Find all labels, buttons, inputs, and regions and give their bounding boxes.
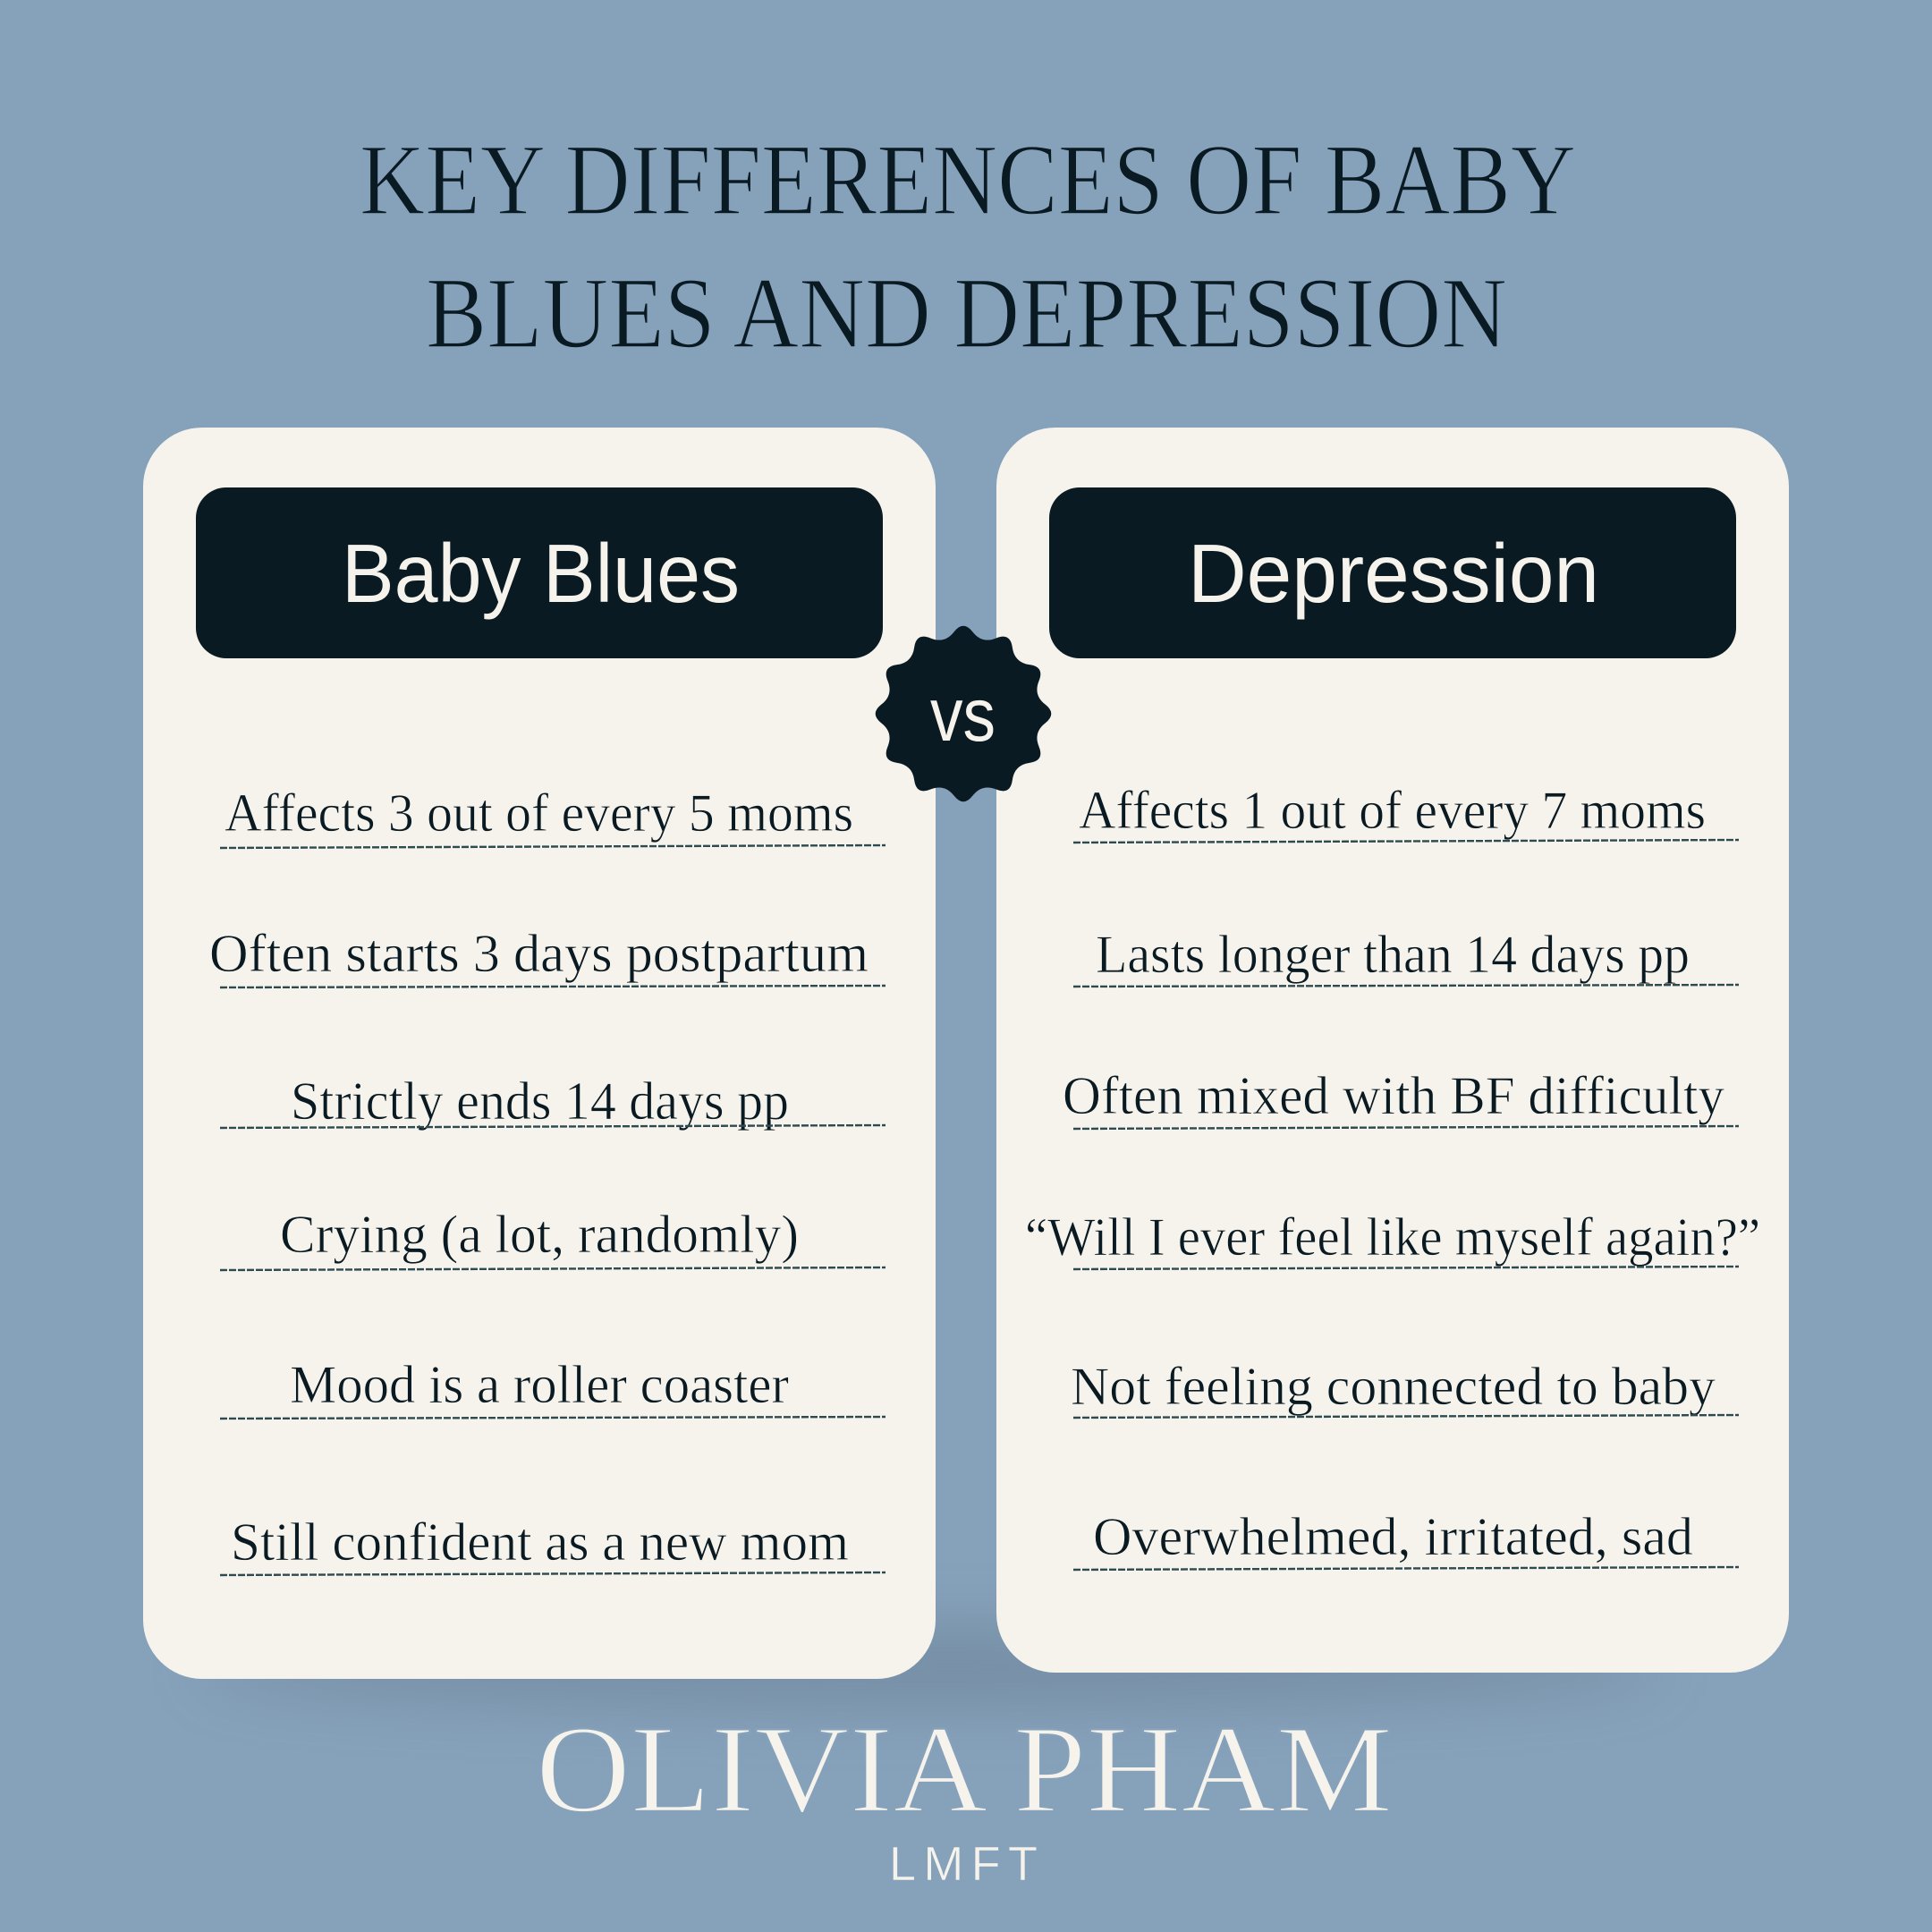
heading: depression bbox=[1049, 487, 1736, 658]
panel: baby blues bbox=[143, 428, 936, 1679]
row: confidence: Still confident as a new mom bbox=[231, 1513, 849, 1572]
brand name: OLIVIA PHAM bbox=[536, 1700, 1393, 1839]
row: prevalence: Affects 3 out of every 5 moms bbox=[225, 784, 853, 843]
heading: baby blues: Baby Blues bbox=[342, 527, 740, 620]
row: crying: Crying (a lot, randomly) bbox=[280, 1205, 799, 1264]
title bbox=[360, 124, 1576, 369]
title: BLUES AND DEPRESSION bbox=[426, 258, 1507, 369]
vs badge: vs bbox=[930, 673, 996, 757]
row: feeding: Often mixed with BF difficulty bbox=[1063, 1066, 1724, 1125]
row: duration: Lasts longer than 14 days pp bbox=[1096, 925, 1690, 984]
row: bonding: Not feeling connected to baby bbox=[1071, 1357, 1716, 1416]
row: emotions: Overwhelmed, irritated, sad bbox=[1093, 1507, 1693, 1566]
heading: baby blues bbox=[196, 487, 883, 658]
card shadow bbox=[197, 1628, 1664, 1707]
title: KEY DIFFERENCES OF BABY bbox=[360, 124, 1576, 236]
heading: depression: Depression bbox=[1188, 527, 1599, 620]
row: duration: Strictly ends 14 days pp bbox=[291, 1072, 789, 1131]
row: identity: “Will I ever feel like myself again?” bbox=[1025, 1208, 1760, 1267]
row: onset: Often starts 3 days postpartum bbox=[209, 924, 869, 983]
brand credential: LMFT bbox=[889, 1837, 1038, 1891]
row: mood: Mood is a roller coaster bbox=[290, 1355, 789, 1414]
panel: depression bbox=[996, 428, 1789, 1673]
row: prevalence: Affects 1 out of every 7 moms bbox=[1079, 781, 1706, 840]
vs badge bbox=[876, 626, 1051, 801]
